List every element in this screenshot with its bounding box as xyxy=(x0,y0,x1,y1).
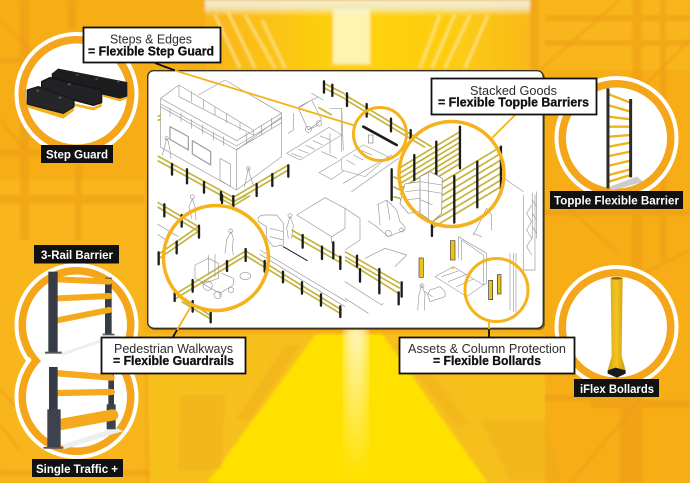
label: 3-rail barrier xyxy=(34,245,119,264)
diagram panel xyxy=(148,71,545,330)
leader line: assets and column xyxy=(488,322,490,337)
callout: assets and column protection: = Flexible Bollards xyxy=(433,354,541,368)
callout: assets and column protection: Assets & Column Protection xyxy=(408,341,566,356)
label: step guard xyxy=(41,145,113,163)
highlight: topple barrier circle xyxy=(399,122,504,226)
highlight: bollard circle xyxy=(465,258,528,322)
leader line: pedestrian walkways xyxy=(173,308,190,337)
top forklift and floor hatching xyxy=(287,81,345,179)
callout: stacked goods: Stacked Goods xyxy=(470,83,557,98)
leader line: steps and edges xyxy=(155,63,356,126)
leader line: stacked goods xyxy=(491,115,515,139)
building with mezzanine rail xyxy=(158,80,282,190)
product circle: topple barrier xyxy=(556,78,676,198)
highlight: guardrail circle xyxy=(164,206,268,310)
callout: pedestrian walkways: Pedestrian Walkways xyxy=(114,341,233,356)
icon: step guard blocks xyxy=(27,69,127,119)
front guardrail xyxy=(158,137,288,202)
label: 3-rail barrier: 3-Rail Barrier xyxy=(41,248,113,262)
callout: stacked goods: = Flexible Topple Barriers xyxy=(438,96,589,110)
product circle: step guard xyxy=(16,34,136,154)
callout: stacked goods xyxy=(432,78,596,114)
callout: assets and column protection xyxy=(400,338,574,374)
top middle guardrails and step guard xyxy=(342,93,432,200)
product circles: 3-rail and single traffic xyxy=(16,265,136,457)
lower-left guardrail xyxy=(158,195,347,322)
callout: steps and edges: = Flexible Step Guard xyxy=(88,44,214,58)
callout: pedestrian walkways: = Flexible Guardrails xyxy=(113,354,234,368)
label: step guard: Step Guard xyxy=(46,148,108,162)
callout: pedestrian walkways xyxy=(102,338,246,374)
isometric warehouse illustration xyxy=(158,80,537,322)
icon: 3-rail barrier xyxy=(45,272,120,356)
floor light streak xyxy=(345,325,367,475)
bollards in diagram xyxy=(419,241,501,300)
callout: steps and edges xyxy=(84,28,220,62)
topple barrier and stacked goods xyxy=(400,127,537,238)
label: iFlex bollards: iFlex Bollards xyxy=(580,382,654,396)
forklift in walkway xyxy=(195,214,347,307)
label: topple flexible barrier: Topple Flexible Barrier xyxy=(554,194,679,208)
product circle: iFlex bollard xyxy=(556,267,676,387)
icon: single traffic plus barrier xyxy=(43,367,123,449)
callout: steps and edges: Steps & Edges xyxy=(110,32,192,46)
icon: bollard xyxy=(608,277,626,378)
highlight: step guard circle xyxy=(354,108,406,160)
label: single traffic plus: Single Traffic + xyxy=(36,462,118,476)
icon: topple barrier frame xyxy=(608,88,643,191)
lower-right bollards, dock and forklift xyxy=(345,195,535,313)
